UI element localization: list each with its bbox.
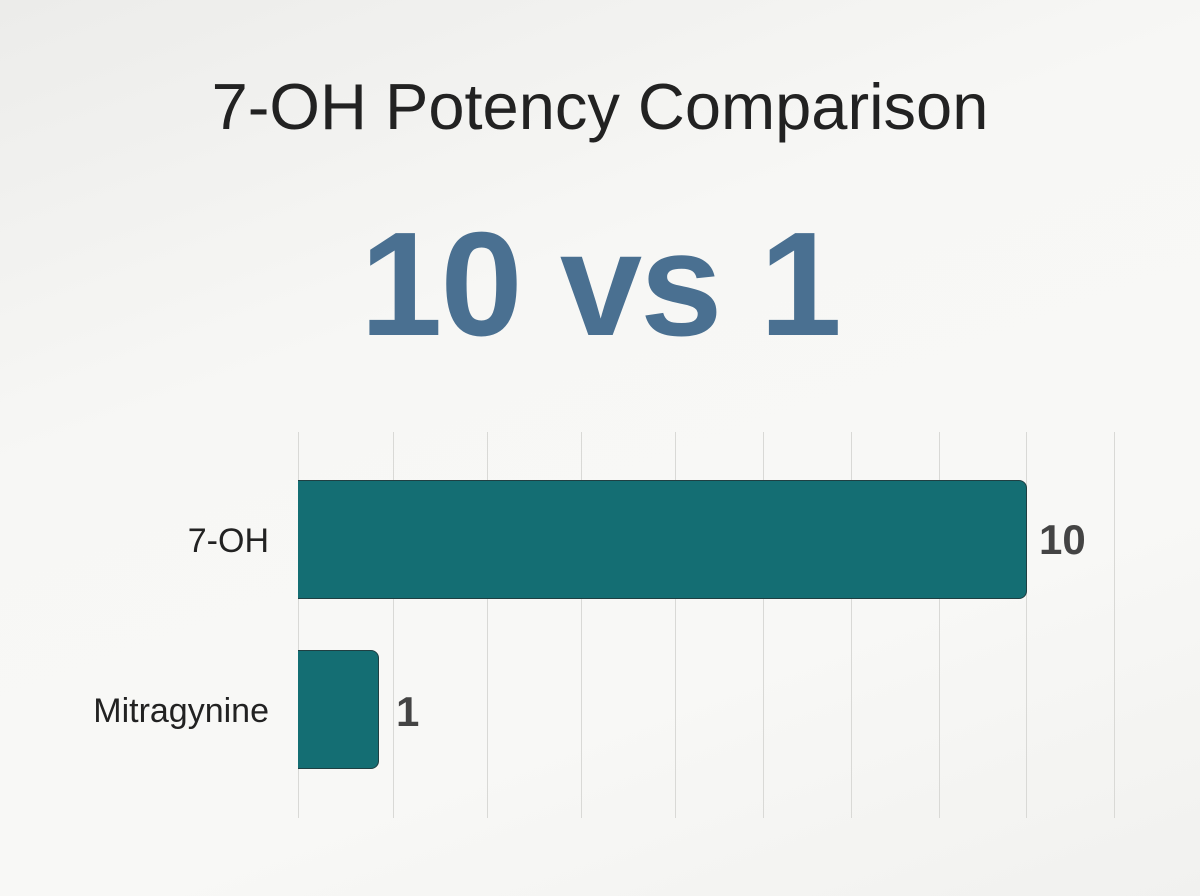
label: Mitragynine: Mitragynine (93, 692, 269, 730)
bar: Mitragynine (298, 650, 379, 769)
bar chart (298, 432, 1115, 818)
value: 10: 10 (1039, 516, 1086, 563)
headline stat: 10 vs 1 (360, 202, 840, 367)
label: 7-OH: 7-OH (188, 522, 269, 560)
title: 7-OH Potency Comparison (212, 70, 988, 143)
bar: 7-OH (298, 480, 1027, 599)
value: 1: 1 (396, 688, 419, 735)
